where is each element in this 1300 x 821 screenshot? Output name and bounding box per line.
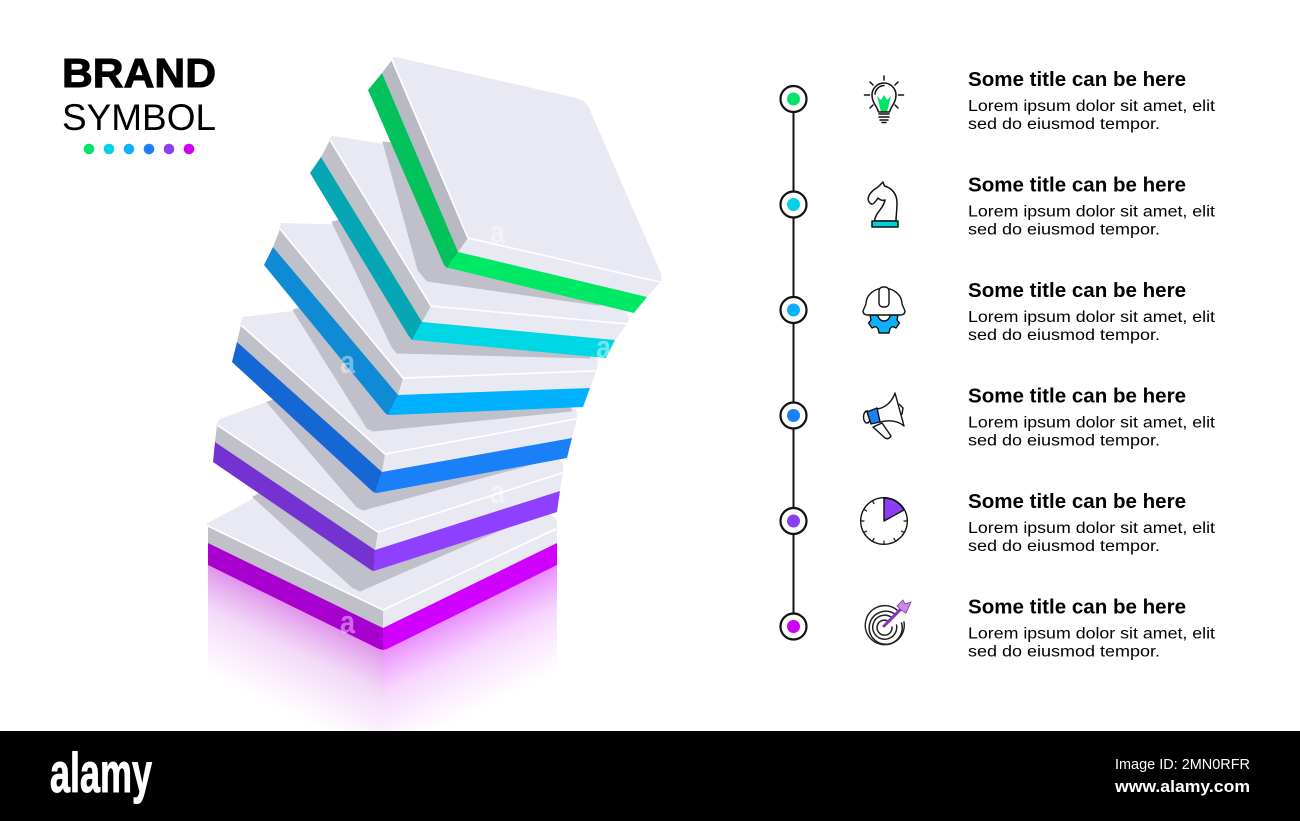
- item 5 text: Some title can be here: [968, 491, 1186, 513]
- icon: light bulb: [864, 76, 904, 122]
- item 3 text: Some title can be here: [968, 280, 1186, 302]
- item 1 text: [968, 69, 1216, 133]
- node 5: [780, 508, 806, 534]
- block 2: teal: [310, 137, 640, 358]
- icon: target with arrow: [865, 600, 911, 645]
- item 4 text: [968, 386, 1216, 450]
- icon: hard hat with gear: [863, 287, 905, 333]
- item 5 text: Lorem ipsum dolor sit amet, elit: [968, 520, 1216, 537]
- item 4 text: Some title can be here: [968, 386, 1186, 408]
- item 2 text: [968, 174, 1216, 238]
- item 3 text: Lorem ipsum dolor sit amet, elit: [968, 309, 1216, 326]
- watermark marks: a: [490, 214, 505, 250]
- item 4 text: sed do eiusmod tempor.: [968, 432, 1160, 450]
- item 1 text: Lorem ipsum dolor sit amet, elit: [968, 98, 1216, 115]
- item 6 text: [968, 596, 1216, 660]
- item 1 text: sed do eiusmod tempor.: [968, 116, 1160, 133]
- block 5: purple: [213, 340, 563, 571]
- item 5 text: [968, 491, 1216, 555]
- item 5 text: sed do eiusmod tempor.: [968, 538, 1160, 555]
- block 3: sky blue: [264, 200, 597, 415]
- item 4 text: Lorem ipsum dolor sit amet, elit: [968, 414, 1216, 432]
- item 3 text: sed do eiusmod tempor.: [968, 327, 1160, 344]
- item 6 text: Some title can be here: [968, 596, 1186, 618]
- item 2 text: sed do eiusmod tempor.: [968, 222, 1160, 238]
- title: brand symbol: [62, 50, 216, 154]
- item 2 text: Lorem ipsum dolor sit amet, elit: [968, 204, 1216, 220]
- item 2 text: Some title can be here: [968, 174, 1186, 196]
- node 1: [780, 86, 806, 112]
- block 1: green: [368, 57, 662, 313]
- icon: megaphone: [864, 393, 904, 439]
- node 2: [780, 192, 806, 218]
- timeline line: [792, 99, 794, 626]
- item 1 text: Some title can be here: [968, 69, 1186, 91]
- website: www.alamy.com: [1114, 778, 1250, 796]
- item 6 text: Lorem ipsum dolor sit amet, elit: [968, 626, 1216, 642]
- heading: BRAND: BRAND: [62, 50, 216, 96]
- watermark marks: a: [340, 344, 355, 380]
- watermark marks: a: [340, 604, 355, 640]
- floor reflection: [208, 565, 557, 731]
- icon: chess knight: [868, 182, 898, 227]
- item 6 text: sed do eiusmod tempor.: [968, 644, 1160, 660]
- block 6: magenta: [208, 420, 557, 650]
- node 3: [780, 297, 806, 323]
- node 4: [780, 402, 806, 428]
- block 4: royal blue: [232, 290, 577, 493]
- timeline: [780, 86, 806, 640]
- isometric stack of six blocks: [208, 57, 662, 731]
- item 3 text: [968, 280, 1216, 344]
- watermark marks: a: [596, 329, 611, 365]
- heading: SYMBOL: SYMBOL: [62, 96, 216, 138]
- image id: Image ID: 2MN0RFR: [1115, 756, 1250, 773]
- node 6: [780, 614, 806, 640]
- colour dots: [84, 144, 194, 154]
- watermark marks: [340, 214, 611, 640]
- icon: clock with purple wedge: [861, 498, 907, 544]
- alamy logo: alamy: [50, 741, 152, 804]
- watermark marks: a: [490, 474, 505, 510]
- footer bar: [0, 731, 1300, 821]
